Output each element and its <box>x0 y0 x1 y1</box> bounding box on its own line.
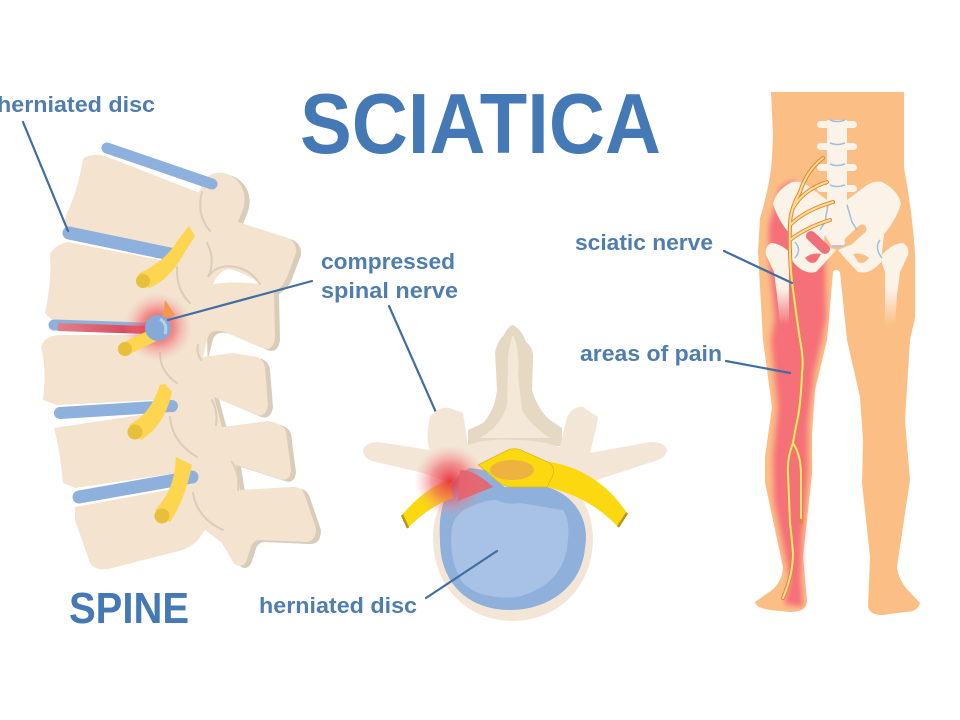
body silhouette <box>755 92 920 615</box>
nerve root 1 <box>136 226 195 288</box>
inflamed disc segment <box>58 327 148 330</box>
left pelvis opening <box>805 254 821 263</box>
vertebra bodies <box>41 155 208 569</box>
label: sciatic nerve: sciatic nerve <box>575 230 713 255</box>
right pelvis opening <box>853 254 869 263</box>
facet joint lines <box>160 192 260 530</box>
left inflamed band <box>811 236 825 249</box>
transverse processes and arch <box>363 407 667 490</box>
spinous highlight <box>480 335 550 438</box>
panel: spine side view <box>41 148 321 569</box>
sciatic nerve <box>783 158 833 598</box>
left compressed nerve <box>402 479 453 528</box>
left femur <box>766 243 794 325</box>
right hip bone <box>838 182 901 273</box>
spinal canal <box>478 449 554 487</box>
sacrum <box>820 205 855 246</box>
compressed nerve root <box>118 300 175 356</box>
right sacroiliac band <box>849 229 862 241</box>
spinal cord <box>490 460 534 480</box>
panel: body with sciatic nerve <box>755 92 920 615</box>
intervertebral discs <box>54 148 212 497</box>
label: sciatic nerve <box>575 230 792 283</box>
herniated disc bulge <box>145 315 171 341</box>
spine posterior column <box>150 173 316 566</box>
disc nucleus <box>451 500 568 597</box>
pelvis and lumbar bones <box>766 120 908 325</box>
nerve end caps <box>402 513 627 528</box>
spine bone shadow <box>205 175 321 568</box>
label: compressed spinal nerve: compressed <box>321 249 455 274</box>
right spinal nerve <box>547 462 627 527</box>
disc annulus <box>440 468 586 610</box>
label: compressed spinal nerve <box>168 249 461 469</box>
label: herniated disc, top: herniated disc <box>0 92 155 117</box>
panel: vertebra cross-section <box>363 325 667 621</box>
label: areas of pain: areas of pain <box>580 341 722 366</box>
label: SPINE: SPINE <box>69 584 189 633</box>
label: compressed spinal nerve: spinal nerve <box>321 278 458 303</box>
herniation tip <box>458 470 493 501</box>
right femur <box>880 243 908 325</box>
pain glow on spine <box>124 293 192 361</box>
pain glow on section <box>414 445 486 517</box>
spinous process <box>468 325 562 446</box>
nerve root 3 <box>128 384 172 440</box>
hip and spine blue lines <box>795 120 882 258</box>
label: areas of pain <box>580 341 790 373</box>
lumbar vertebrae <box>817 120 857 210</box>
foramen opening <box>213 269 260 284</box>
label: herniated disc, bottom: herniated disc <box>259 593 417 618</box>
left hip bone <box>773 182 836 273</box>
nerve root 4 <box>154 457 192 524</box>
label: herniated disc, top <box>0 92 155 231</box>
label: herniated disc, bottom <box>259 551 497 618</box>
vertebral body outer ring <box>433 458 593 621</box>
area of pain <box>769 180 826 607</box>
title: SCIATICA <box>300 77 661 172</box>
